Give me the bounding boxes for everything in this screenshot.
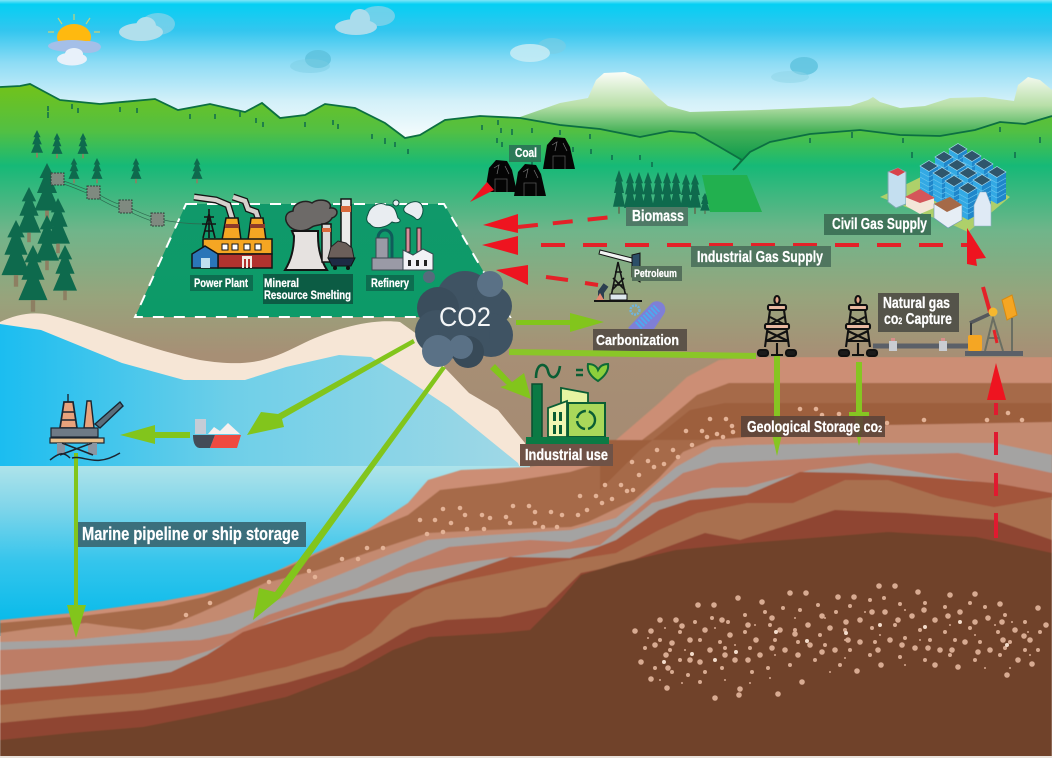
label: mineral resource smelting: Resource Smelting xyxy=(264,288,351,302)
label: mineral resource smelting xyxy=(263,274,353,304)
label: geological storage co2 xyxy=(741,416,885,437)
gas pipeline xyxy=(873,338,970,351)
label: refinery: Refinery xyxy=(371,276,409,290)
left forest xyxy=(1,130,202,312)
hills and ground xyxy=(0,84,1052,500)
label: biomass: Biomass xyxy=(632,208,684,225)
bottom edge strip xyxy=(0,756,1052,758)
label: natural gas co2 capture xyxy=(878,293,959,332)
green line: CO2 to geological storage xyxy=(509,349,756,359)
lower sea xyxy=(0,466,530,636)
label: natural gas co2 capture: Natural gas xyxy=(883,295,950,312)
sky background xyxy=(0,0,1052,145)
icon: industrial use factory xyxy=(526,364,609,444)
transmission pylons and power lines xyxy=(51,173,204,226)
icon: mineral smelting xyxy=(285,199,355,270)
green arrow: geological injection 1 xyxy=(771,356,783,456)
sun behind cloud icon xyxy=(48,14,101,66)
icon: coal mines xyxy=(485,137,575,196)
underground geological layers xyxy=(0,357,1052,758)
label: industrial gas supply xyxy=(691,246,831,267)
icon: offshore platform xyxy=(50,394,123,460)
red arrow: from coal xyxy=(470,182,494,202)
icon: cargo ship xyxy=(193,419,241,448)
label: coal: Coal xyxy=(515,146,537,160)
label: industrial use xyxy=(520,444,613,466)
hill ridge lines xyxy=(0,84,1052,170)
pebbles in upper rock band xyxy=(186,409,1022,615)
label: coal xyxy=(509,145,541,162)
crop field xyxy=(702,175,762,212)
icon: petroleum pumpjack xyxy=(594,250,642,301)
label: industrial use: Industrial use xyxy=(525,447,608,464)
icon: natural gas pumpjack xyxy=(965,295,1023,356)
label: power plant: Power Plant xyxy=(194,276,248,290)
label: civil gas supply xyxy=(824,214,931,235)
green arrow: to ship xyxy=(247,339,415,435)
biomass forest xyxy=(613,170,710,215)
red arrow: petroleum xyxy=(496,265,598,285)
label: petroleum: Petroleum xyxy=(634,268,677,280)
icon: power plant xyxy=(192,197,272,268)
label: marine pipeline: Marine pipeline or ship storage xyxy=(82,524,299,544)
clouds xyxy=(119,6,818,83)
dashed industrial zone panel xyxy=(135,204,510,317)
icon: drilling towers xyxy=(758,296,877,356)
hillside small trees xyxy=(48,104,1040,167)
green arrow: to seabed storage xyxy=(253,366,446,620)
CO2 cloud xyxy=(415,271,513,368)
red arrow: civil gas xyxy=(967,228,990,312)
green arrow: to carbonization xyxy=(516,313,604,332)
icon: city buildings xyxy=(880,144,1010,232)
label: mineral resource smelting: Mineral xyxy=(264,276,299,290)
back mountains xyxy=(520,72,1052,170)
red arrow: biomass xyxy=(483,214,622,233)
red arrow: industrial gas xyxy=(482,236,968,255)
label: industrial gas supply: Industrial Gas Supply xyxy=(697,249,823,266)
label: natural gas co2 capture: co2 Capture xyxy=(884,311,952,328)
green arrow: platform down to seabed xyxy=(67,453,86,638)
sand beach xyxy=(0,313,528,470)
CO2 cloud: CO2 xyxy=(439,302,491,332)
label: civil gas supply: Civil Gas Supply xyxy=(832,216,927,233)
label: geological storage co2: Geological Storage co2 xyxy=(747,419,882,436)
green arrow: to industrial use xyxy=(490,364,531,399)
label: carbonization: Carbonization xyxy=(596,332,679,349)
red arrow: gas rising from reservoir xyxy=(987,363,1006,538)
upper sea xyxy=(0,324,520,468)
label: marine pipeline xyxy=(78,522,306,547)
green arrow: geological injection 2 xyxy=(849,362,869,446)
label: carbonization xyxy=(593,329,687,351)
icon: carbonization tube and gear xyxy=(628,301,665,338)
icon: refinery xyxy=(367,200,433,270)
green arrow: ship to platform xyxy=(120,425,190,444)
pebble cluster in deep rock xyxy=(635,586,1046,698)
